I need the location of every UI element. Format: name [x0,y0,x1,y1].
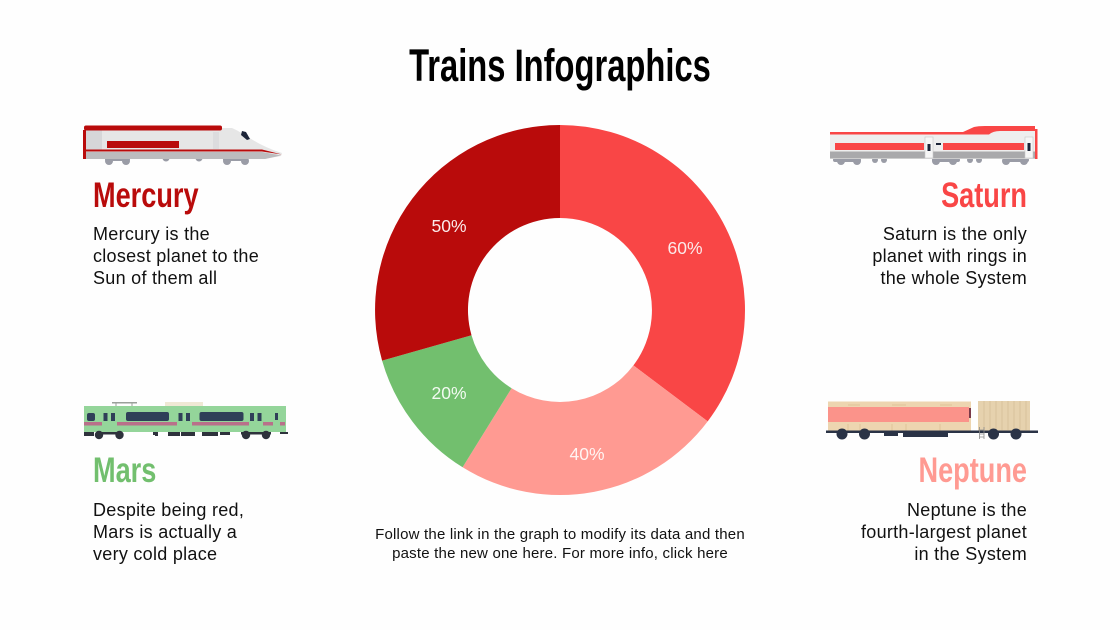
panel: Neptune [861,451,1027,564]
label: 20%: 20% [431,383,467,403]
icon: red regional train [830,126,1038,165]
heading: Mars: Mars [93,451,156,490]
text: Neptune description: in the System [914,544,1027,564]
panel: Mercury [93,176,259,288]
text: Saturn description [872,224,1027,288]
heading: Saturn: Saturn [941,176,1027,215]
icon: green commuter train [84,402,288,439]
text: Saturn description: the whole System [880,268,1027,288]
text: Mars description: Despite being red, [93,500,244,520]
slice: 20% [382,335,512,467]
donut chart [375,125,745,495]
caption [375,526,745,562]
label: 50%: 50% [431,216,467,236]
title: Trains Infographics [409,40,711,91]
text: Saturn description: Saturn is the only [883,224,1027,244]
text: Neptune description: Neptune is the [907,500,1027,520]
text: Saturn description: planet with rings in [872,246,1027,266]
text: Mercury description: Mercury is the [93,224,210,244]
text: Mars description: Mars is actually a [93,522,237,542]
text: Mars description: very cold place [93,544,217,564]
slice: 50% [375,125,560,361]
icon: white bullet train [83,126,282,165]
label: 40%: 40% [569,444,605,464]
label: 60%: 60% [667,238,703,258]
text: Mercury description: Sun of them all [93,268,217,288]
heading: Neptune: Neptune [918,451,1027,490]
heading: Mercury: Mercury [93,176,199,215]
caption: Follow the link in the graph to modify its data and then [375,526,745,543]
caption: paste the new one here. For more info, click here [392,545,728,562]
icon: freight wagon [826,401,1038,440]
text: Neptune description: fourth-largest planet [861,522,1027,542]
text: Mars description [93,500,244,564]
slice: 60% [560,125,745,421]
text: Mercury description: closest planet to the [93,246,259,266]
text: Neptune description [861,500,1027,564]
text: Mercury description [93,224,259,288]
slice: 40% [463,365,708,495]
panel: Saturn [872,176,1027,288]
panel: Mars [93,451,244,564]
